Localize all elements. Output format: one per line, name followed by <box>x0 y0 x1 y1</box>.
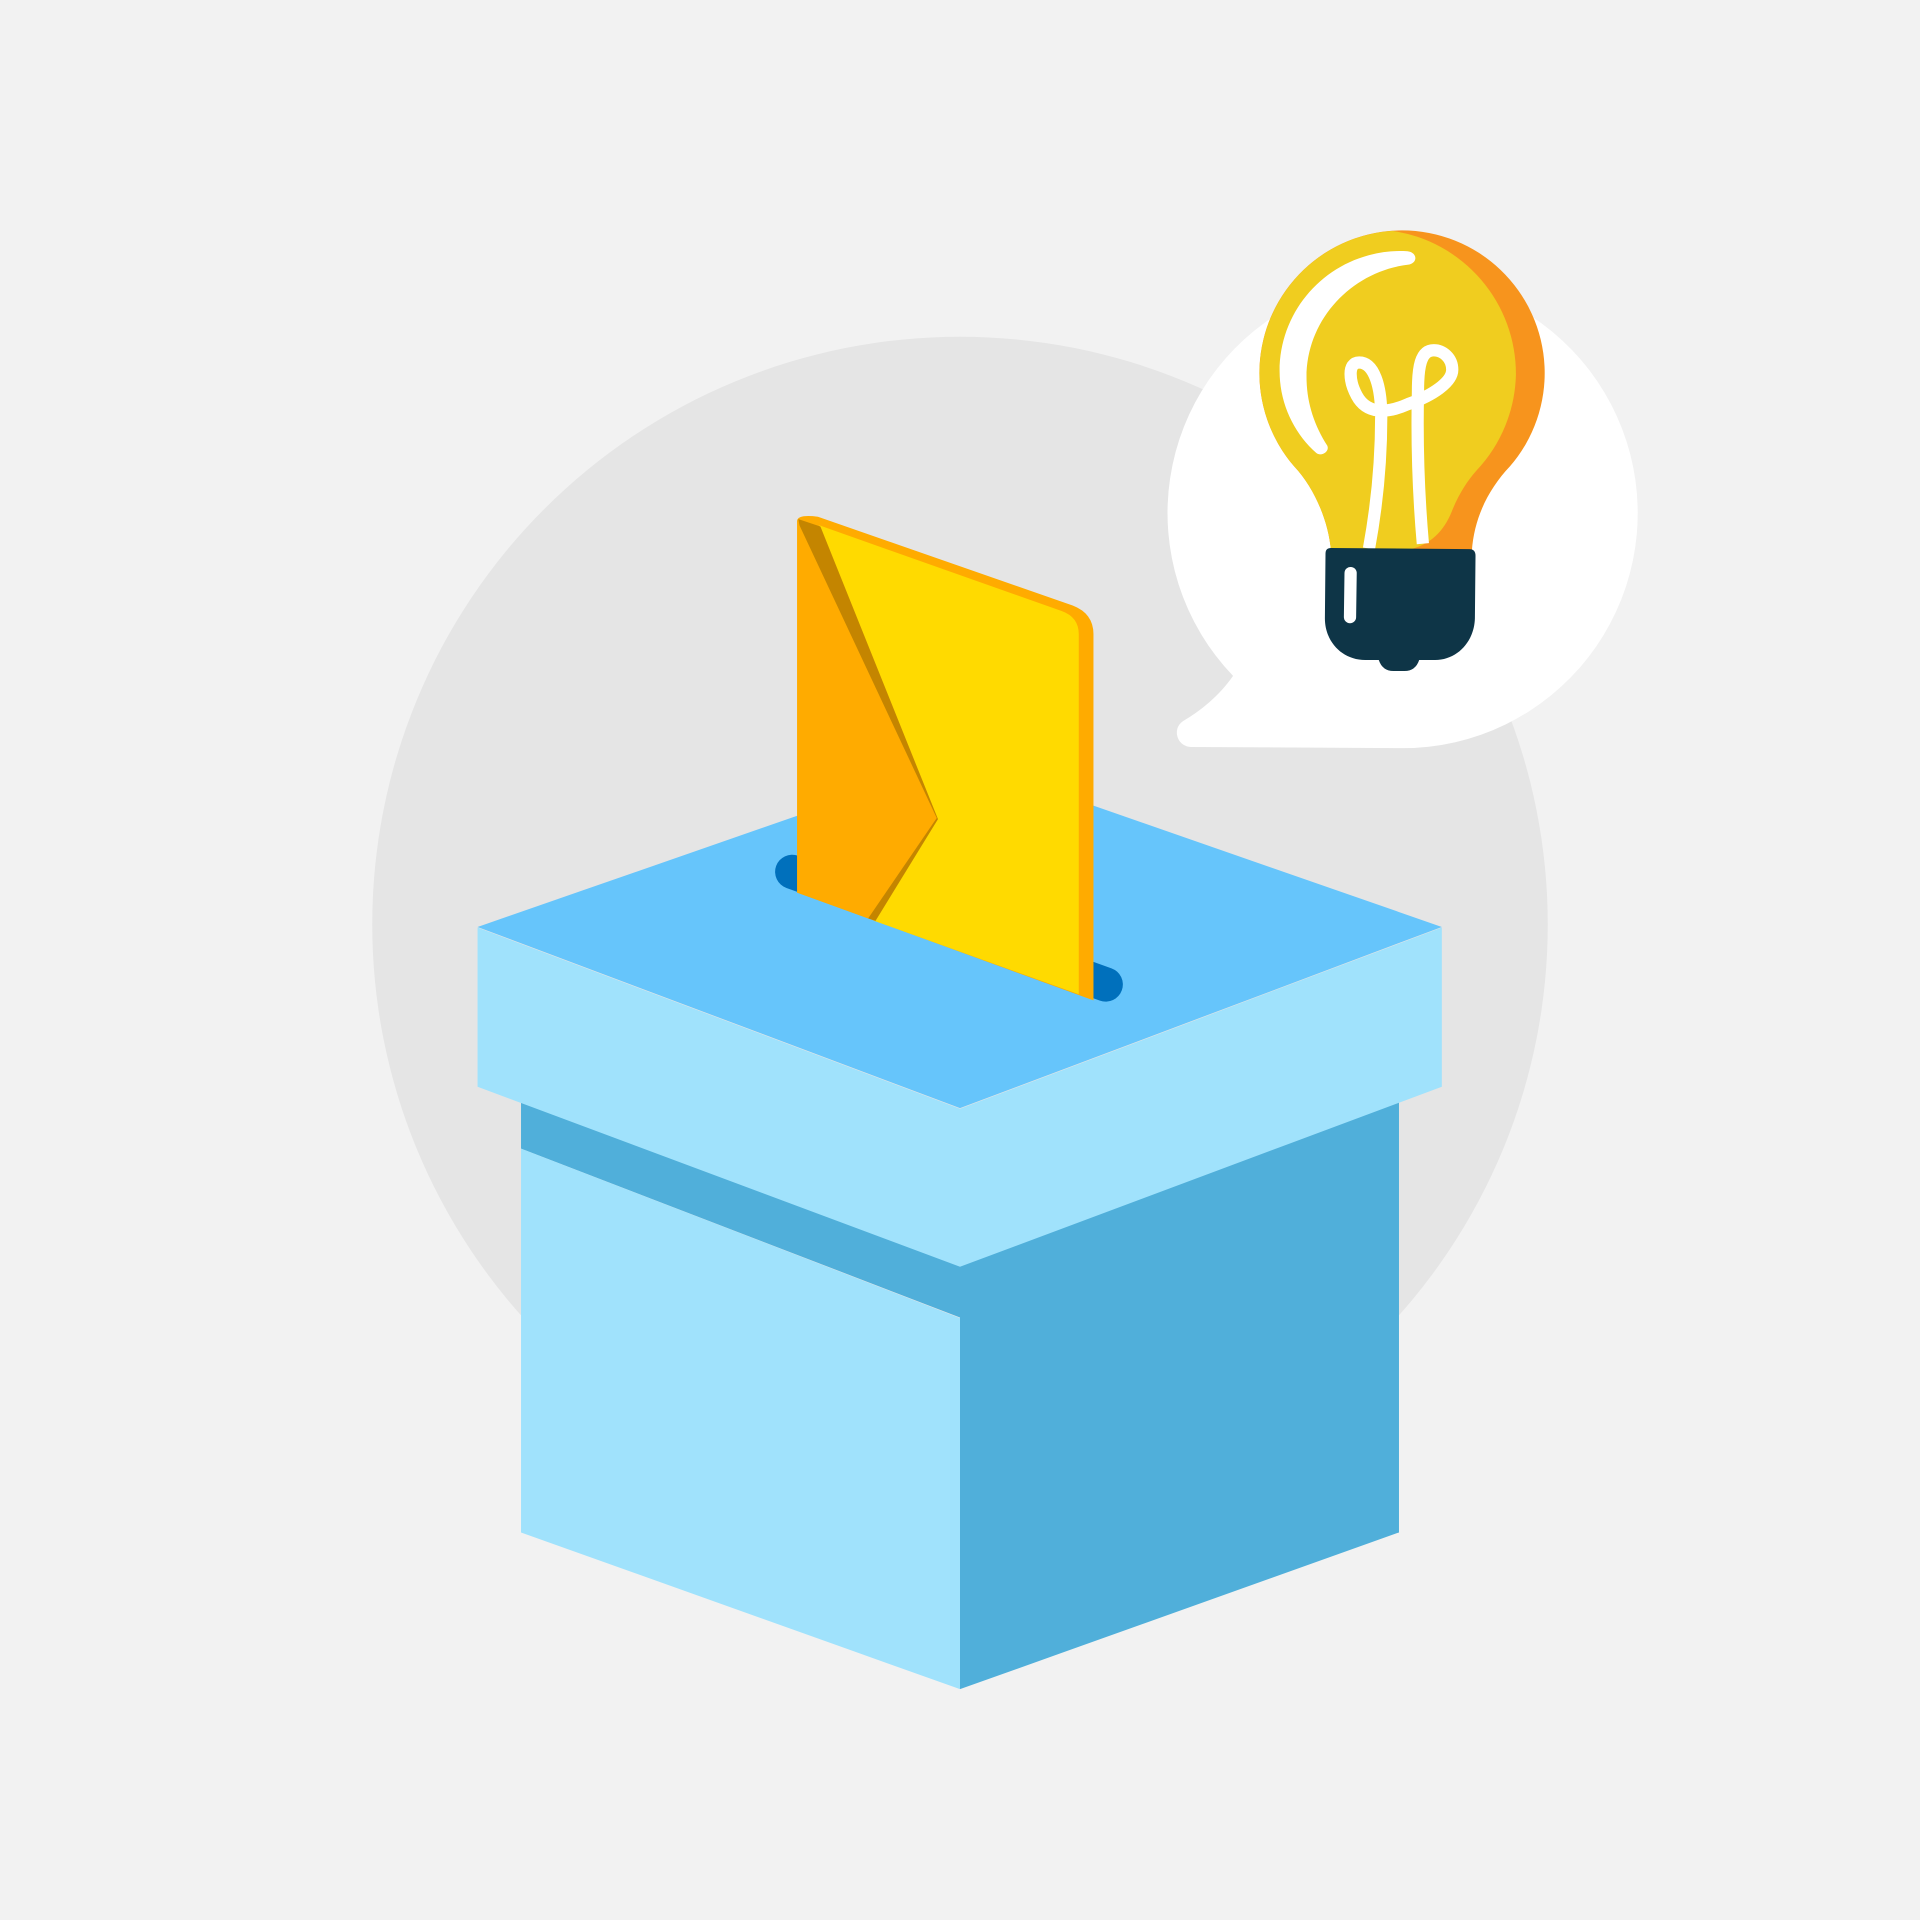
grey background circle <box>372 337 1548 1512</box>
speech bubble <box>1168 278 1638 748</box>
box right face <box>521 1078 1399 1689</box>
bulb glass <box>1259 231 1516 551</box>
filament <box>1351 350 1452 549</box>
envelope orange flap <box>797 520 937 918</box>
base highlight <box>1345 573 1356 617</box>
envelope <box>797 516 1093 1000</box>
bulb highlight <box>1280 251 1415 454</box>
box left face <box>521 1149 960 1689</box>
bulb base <box>1325 548 1476 671</box>
envelope back <box>797 516 1093 1000</box>
bulb glass shadow <box>1259 230 1545 551</box>
icon: light bulb <box>1259 230 1545 671</box>
lid top <box>478 759 1442 1108</box>
envelope yellow face <box>819 525 1079 994</box>
ballot box <box>478 759 1442 1689</box>
ballot slot <box>792 872 1106 984</box>
lid front rim <box>478 928 1442 1267</box>
flap shadow <box>798 519 938 921</box>
